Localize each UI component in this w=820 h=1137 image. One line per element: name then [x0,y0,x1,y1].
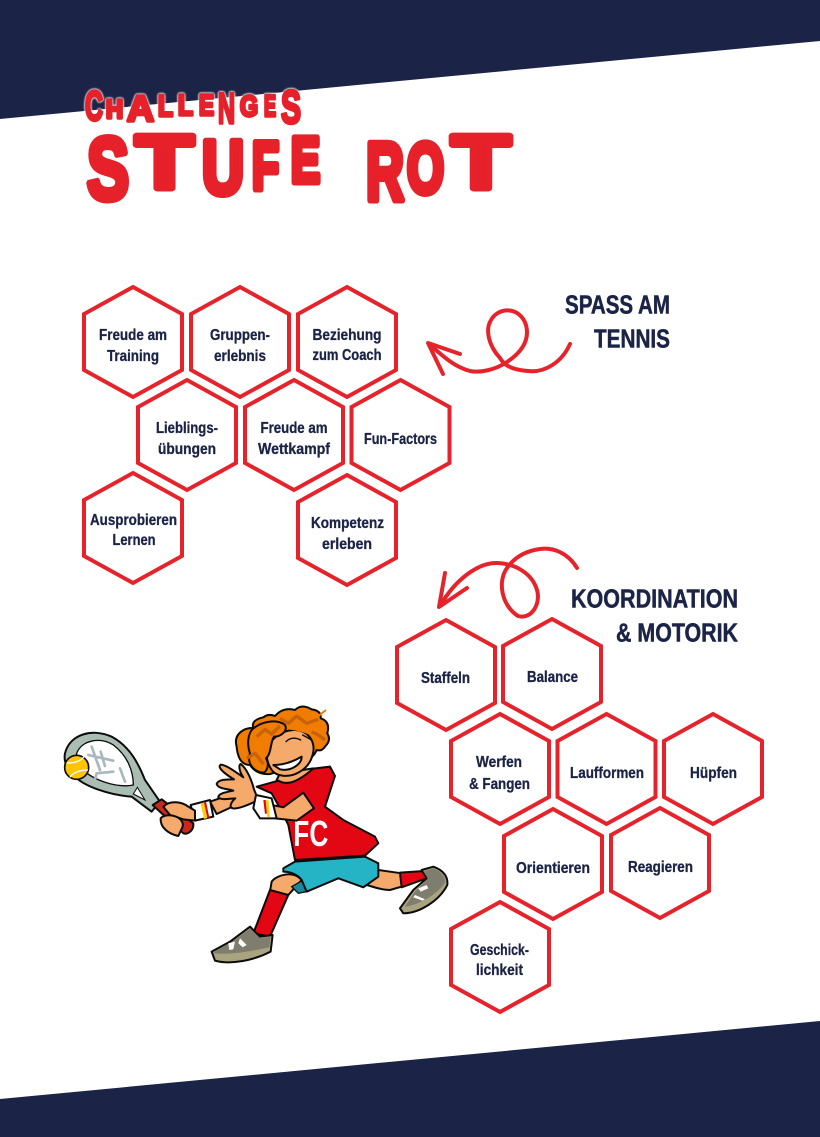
heading: Koordination und Motorik [571,586,738,648]
hexagon group: Spass am Tennis [84,287,450,585]
hexagon: Freude am Wettkampf [245,380,343,490]
title: Challenges: G [240,91,258,123]
hexagon: Hüpfen: Hüpfen [690,765,737,782]
hexagon: Ausprobieren Lernen: Ausprobieren [90,512,177,529]
hexagon: Freude am Training [84,287,182,397]
back leg and shoe [367,867,447,913]
hexagon: Staffeln [397,620,495,730]
hexagon: Freude am Wettkampf: Freude am [260,420,328,437]
title: Stufe Rot: T [452,120,510,204]
arrow: loop to Koordination hexagons [439,549,577,617]
hexagon: Balance: Balance [527,669,578,686]
hexagon: Laufformen [558,714,656,824]
title: Challenges: C [85,82,103,129]
hexagon: Beziehung zum Coach [298,287,396,397]
title: Challenges: L [158,90,173,123]
hexagon: Laufformen: Laufformen [570,765,644,782]
hexagon: Lieblingsübungen [138,380,236,490]
title: Challenges: E [264,90,276,123]
hexagon group: Koordination und Motorik [397,619,762,1012]
title: Challenges: H [106,94,123,124]
hexagon: Freude am Training: Training [107,348,159,365]
title: Challenges: S [281,81,301,133]
hexagon: Gruppenerlebnis: Gruppen- [210,327,270,344]
icon: tennis ball [65,755,89,779]
hexagon: Freude am Training: Freude am [99,327,167,344]
title: Challenges: E [199,90,214,122]
front leg and shoe [212,874,302,962]
title: Stufe Rot: T [136,120,193,204]
arrow: loop to Spass hexagons [428,310,570,374]
shirt lettering: FC: FC [293,813,328,854]
left arm with wristband [253,793,314,821]
hexagon: Geschicklichkeit: Geschick- [470,942,529,959]
title: Stufe Rot: R [366,125,404,218]
heading: Koordination und Motorik: KOORDINATION [571,586,738,614]
title: Challenges: N [218,85,235,133]
shorts [283,857,378,893]
heading: Spass am Tennis: SPASS AM [565,292,670,320]
heading: Spass am Tennis: TENNIS [594,326,670,354]
hexagon: Werfen und Fangen: & Fangen [469,776,530,793]
hexagon: Kompetenz erleben [298,475,396,585]
hexagon: Geschicklichkeit: lichkeit [476,962,523,979]
title: Stufe Rot [87,119,510,218]
title: Challenges: L [178,90,193,122]
hexagon: Hüpfen [664,714,762,824]
heading: Koordination und Motorik: & MOTORIK [616,620,738,648]
hexagon: Geschicklichkeit [451,902,549,1012]
hexagon: Beziehung zum Coach: zum Coach [312,347,382,364]
hexagon: Kompetenz erleben: Kompetenz [311,515,384,532]
illustration: tennis player [65,706,447,962]
hexagon: Gruppenerlebnis: erlebnis [214,348,266,365]
head with curly hair [236,706,329,776]
title: Stufe Rot: F [252,128,279,204]
icon: racket [65,733,193,834]
hexagon: Orientieren [504,809,602,919]
hexagon: Orientieren: Orientieren [516,860,590,877]
title: Stufe Rot: U [202,126,244,211]
title: Stufe Rot: O [407,130,444,209]
top navy banner [0,0,820,119]
neck [277,768,313,784]
heading: Spass am Tennis [565,292,670,354]
hexagon: Freude am Wettkampf: Wettkampf [258,441,331,458]
open left hand [217,764,258,808]
hexagon: Kompetenz erleben: erleben [322,536,372,553]
hexagon: Lieblingsübungen: übungen [158,441,216,458]
hexagon: Werfen und Fangen [451,714,549,824]
bottom navy banner [0,1021,820,1137]
hexagon: Staffeln: Staffeln [421,670,470,687]
hexagon: Reagieren: Reagieren [628,859,693,876]
title: Challenges: A [127,88,154,129]
hexagon: Lieblingsübungen: Lieblings- [156,420,218,437]
right arm and hand with grip [161,796,243,836]
hexagon: Ausprobieren Lernen [84,473,182,583]
title: Challenges [85,81,301,133]
hexagon: Balance [503,619,601,729]
hexagon: Ausprobieren Lernen: Lernen [112,532,156,549]
hexagon: Fun-Factors [352,380,450,490]
hexagon: Gruppenerlebnis [191,287,289,397]
hexagon: Fun-Factors: Fun-Factors [364,431,437,448]
hexagon: Beziehung zum Coach: Beziehung [312,327,382,344]
hexagon: Reagieren [611,808,709,918]
title: Stufe Rot: S [87,119,129,218]
hexagon: Werfen und Fangen: Werfen [476,754,522,771]
shirt [257,767,378,860]
title: Stufe Rot: E [291,124,320,196]
